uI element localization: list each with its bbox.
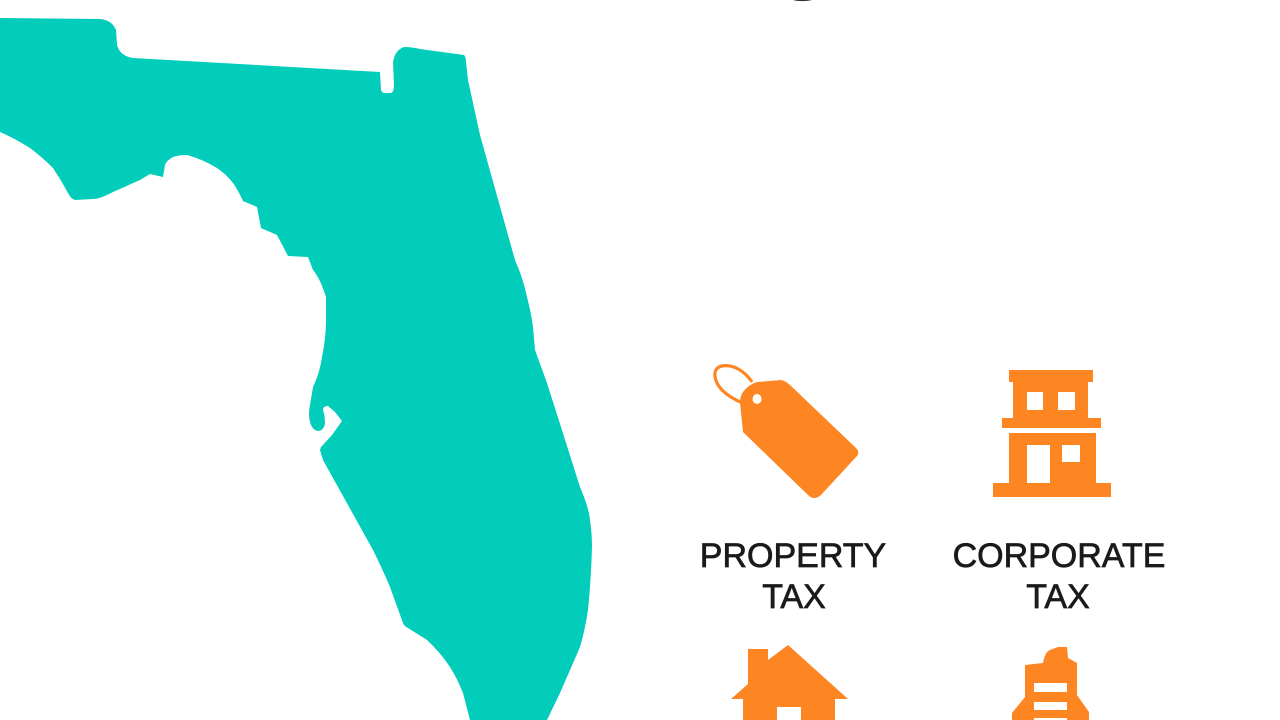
map: Florida silhouette — [0, 18, 592, 720]
label: corporate tax: CORPORATE — [953, 537, 1165, 575]
label: property tax: TAX — [762, 578, 826, 616]
panel: corporate tax — [953, 370, 1165, 616]
label: corporate tax: TAX — [1026, 578, 1090, 616]
icon: tower building — [1012, 647, 1089, 720]
icon: price tag — [715, 366, 858, 498]
cropped heading fragment — [793, 0, 812, 1]
label: property tax: PROPERTY — [700, 537, 886, 575]
icon: office building — [993, 370, 1111, 497]
icon: house — [731, 645, 848, 720]
panel: property tax — [700, 366, 886, 616]
